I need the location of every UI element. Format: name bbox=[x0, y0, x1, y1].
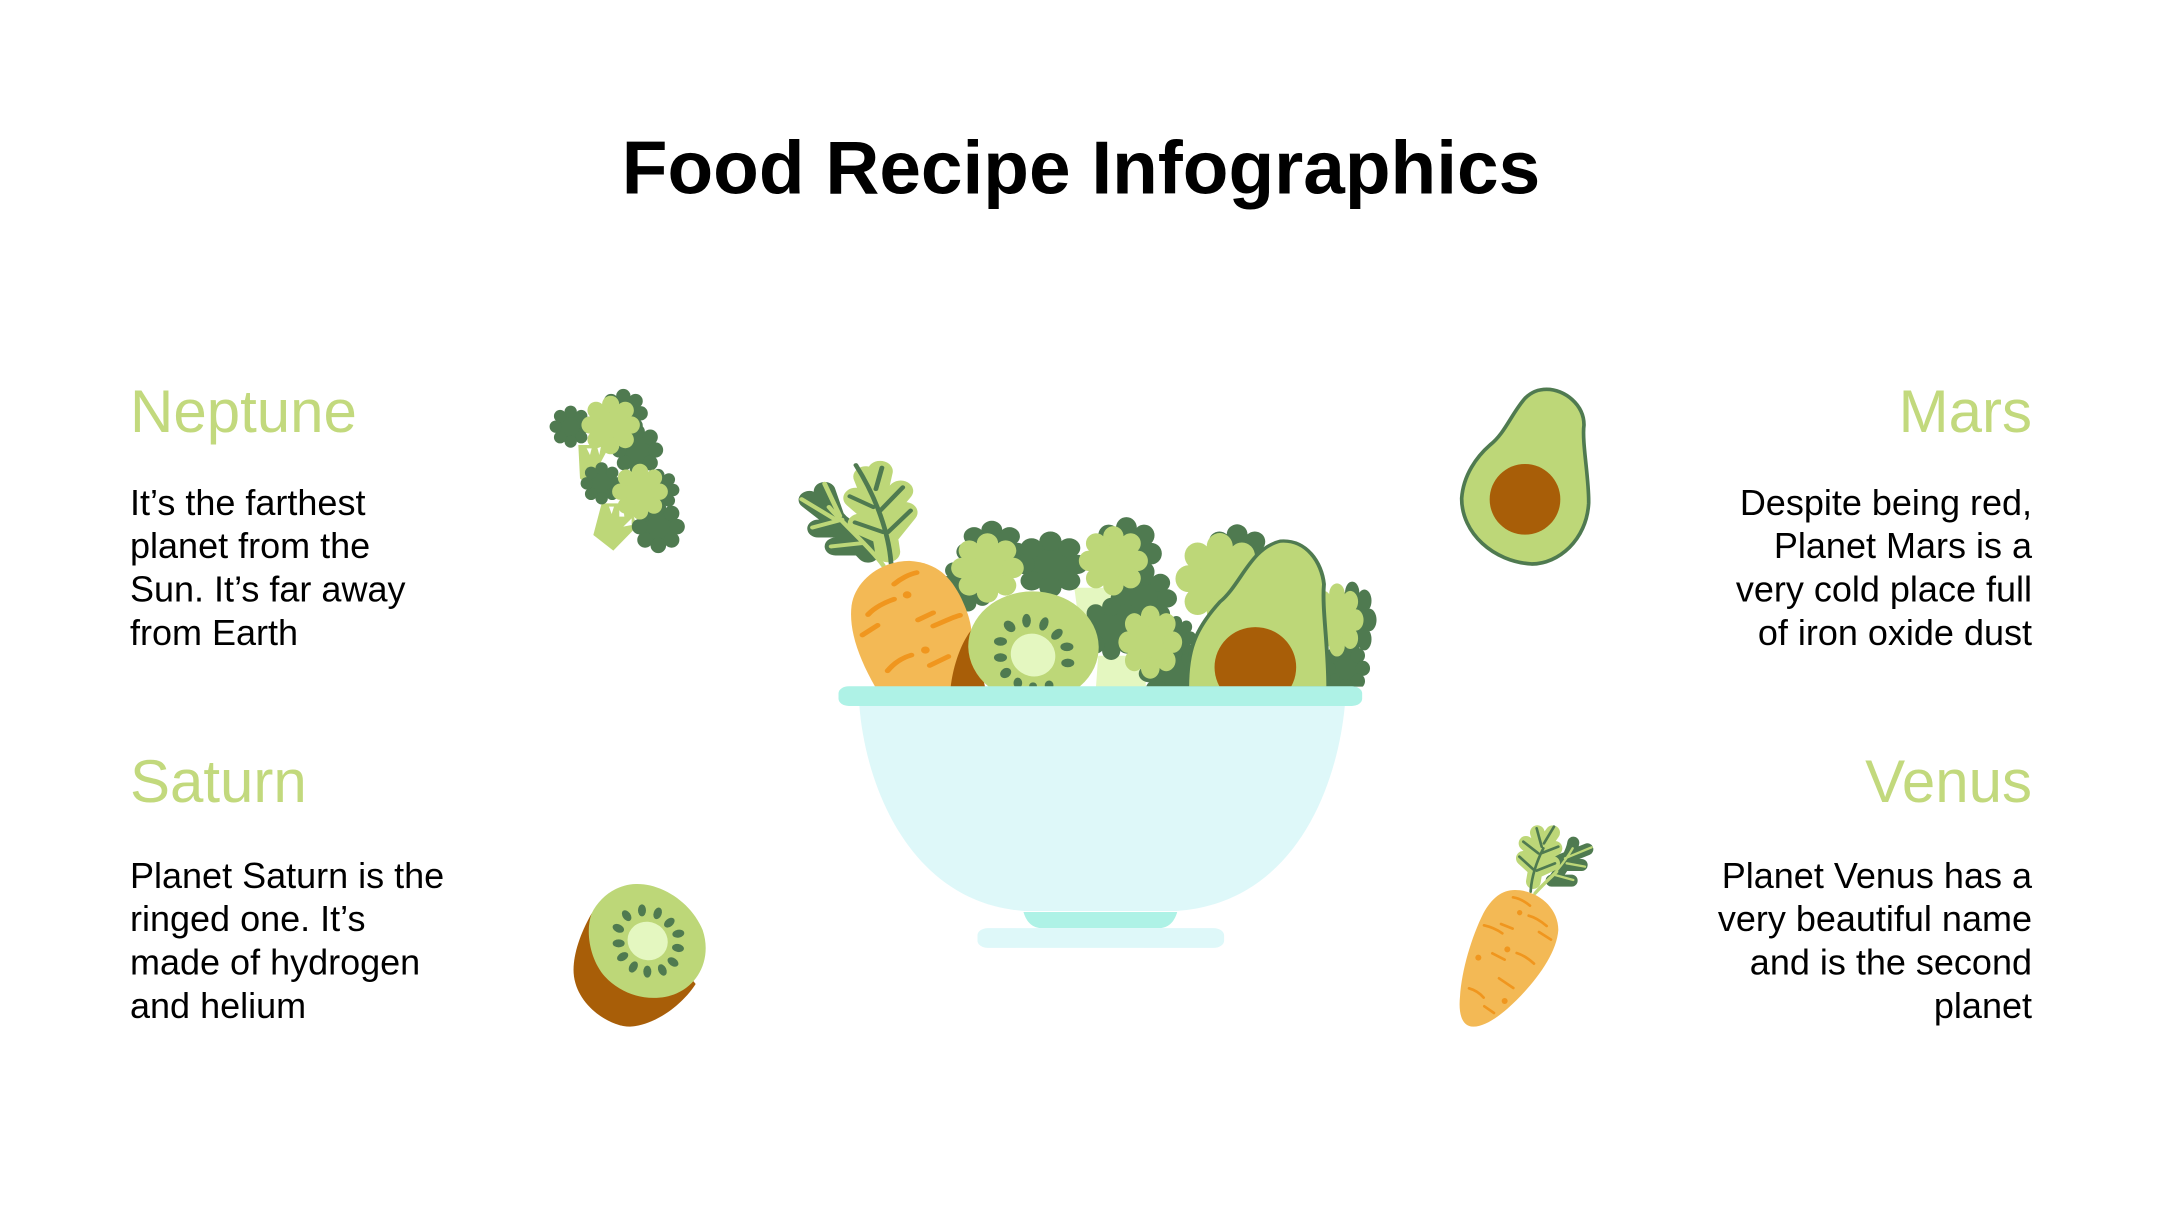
text block: Neptune bbox=[130, 482, 405, 653]
illustration: salad bowl bbox=[802, 465, 1377, 948]
carrot in bowl bbox=[851, 561, 972, 688]
icon: kiwi bbox=[574, 884, 706, 1027]
text block: Venus: Planet Venus has a bbox=[1722, 855, 2033, 896]
title: Food Recipe Infographics bbox=[622, 126, 1540, 210]
icon: carrot bbox=[1460, 827, 1592, 1027]
avocado in bowl bbox=[1189, 539, 1329, 686]
heading: Venus: Venus bbox=[1865, 748, 2032, 815]
broccoli in bowl bbox=[939, 517, 1377, 703]
text block: Venus: very beautiful name bbox=[1718, 898, 2032, 939]
carrot leaves in bowl bbox=[802, 465, 911, 565]
heading: Mars: Mars bbox=[1899, 378, 2032, 445]
kiwi in bowl bbox=[950, 591, 1099, 686]
icon: avocado bbox=[1462, 389, 1589, 564]
text block: Mars: Planet Mars is a bbox=[1774, 525, 2033, 566]
text block: Saturn: made of hydrogen bbox=[130, 942, 420, 982]
text block: Saturn: ringed one. It’s bbox=[130, 898, 366, 939]
text block: Venus: and is the second bbox=[1750, 942, 2032, 982]
text block: Mars: of iron oxide dust bbox=[1758, 612, 2032, 653]
text block: Neptune: Sun. It’s far away bbox=[130, 568, 405, 610]
bowl rim bbox=[839, 686, 1362, 706]
text block: Saturn bbox=[130, 855, 444, 1026]
text block: Saturn: and helium bbox=[130, 985, 306, 1026]
text block: Venus bbox=[1718, 855, 2033, 1026]
text block: Mars: Despite being red, bbox=[1740, 482, 2032, 523]
text block: Venus: planet bbox=[1934, 985, 2032, 1026]
text block: Mars bbox=[1736, 482, 2033, 653]
heading: Neptune: Neptune bbox=[130, 378, 357, 445]
text block: Neptune: planet from the bbox=[130, 525, 370, 566]
text block: Saturn: Planet Saturn is the bbox=[130, 855, 444, 896]
text block: Neptune: It’s the farthest bbox=[130, 482, 365, 523]
heading: Saturn: Saturn bbox=[130, 748, 307, 815]
text block: Neptune: from Earth bbox=[130, 612, 298, 653]
text block: Mars: very cold place full bbox=[1736, 568, 2032, 610]
bowl foot bbox=[1023, 912, 1177, 928]
vegetables in bowl bbox=[802, 465, 1377, 712]
icon: broccoli bbox=[550, 389, 685, 553]
bowl body bbox=[859, 706, 1345, 911]
bowl base bbox=[977, 928, 1224, 948]
